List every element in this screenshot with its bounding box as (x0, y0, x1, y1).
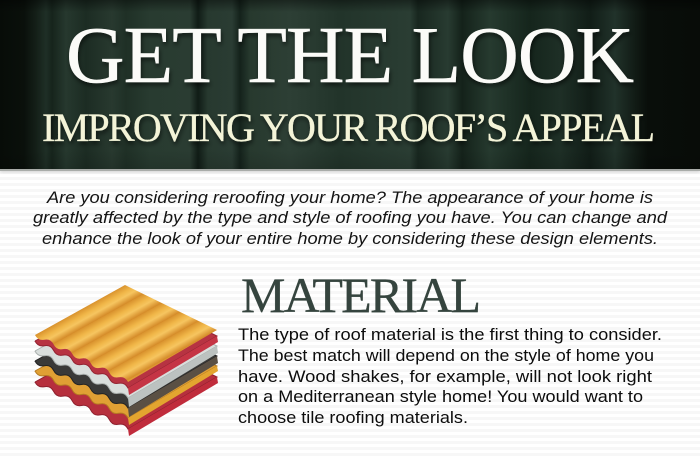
material description (238, 326, 662, 427)
material description: have. Wood shakes, for example, will not look right (238, 368, 652, 386)
intro paragraph (33, 189, 668, 248)
header banner (0, 0, 700, 171)
material description: on a Mediterranean style home! You would want to (238, 388, 643, 406)
title: GET THE LOOK (66, 10, 634, 100)
subtitle: IMPROVING YOUR ROOF’S APPEAL (42, 105, 655, 150)
intro paragraph: Are you considering reroofing your home? The appearance of your home is (46, 189, 653, 207)
heading: material: MATERIAL (241, 267, 481, 323)
icon: stacked roofing material sheets (35, 285, 218, 436)
intro paragraph: enhance the look of your entire home by considering these design elements. (42, 230, 658, 248)
material description: The best match will depend on the style of home you (238, 347, 654, 365)
intro paragraph: greatly affected by the type and style of roofing you have. You can change and (33, 209, 668, 227)
material description: The type of roof material is the first thing to consider. (238, 326, 662, 344)
material description: choose tile roofing materials. (238, 409, 468, 427)
